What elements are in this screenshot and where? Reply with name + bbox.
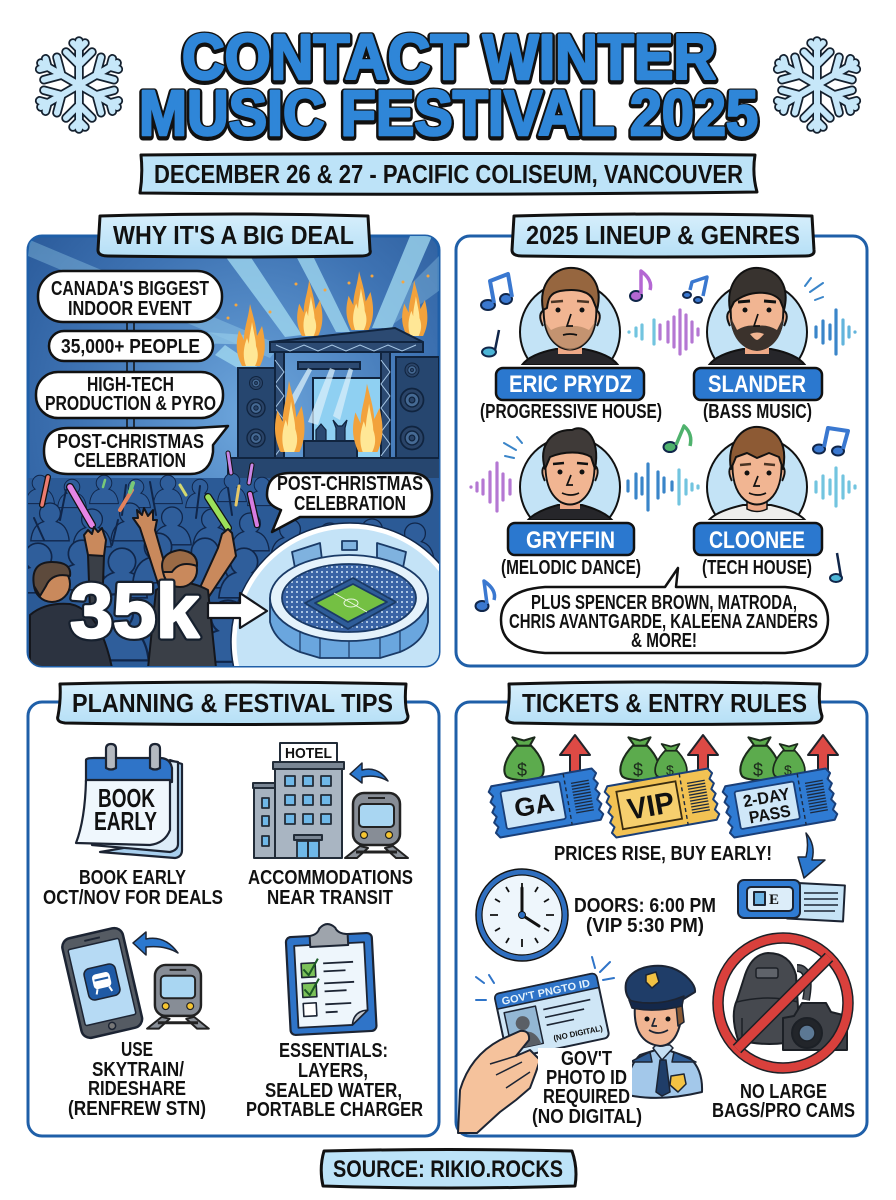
heading: tickets bbox=[507, 682, 822, 724]
icon: phone with transit app bbox=[61, 926, 144, 1040]
heading: why it's a big deal bbox=[98, 214, 370, 257]
bubble: high-tech production and pyro: HIGH-TECH bbox=[87, 374, 174, 396]
sound waves bbox=[471, 310, 855, 511]
caption: essentials: ESSENTIALS: bbox=[279, 1040, 388, 1062]
caption: essentials: PORTABLE CHARGER bbox=[246, 1099, 423, 1121]
arrow to phone bbox=[133, 932, 178, 955]
text: doors: DOORS: 6:00 PM bbox=[574, 895, 716, 917]
icon: right snowflake bbox=[772, 41, 862, 129]
callout: more artists bbox=[501, 568, 828, 653]
caption: essentials bbox=[246, 1040, 423, 1121]
crowd bbox=[13, 473, 440, 668]
genre: (TECH HOUSE) bbox=[702, 557, 812, 579]
icon: security officer bbox=[626, 966, 702, 1098]
stage with truss, screen and DJ bbox=[228, 328, 440, 482]
panel: why it's a big deal bbox=[26, 212, 440, 668]
heading: why it's a big deal: WHY IT'S A BIG DEAL bbox=[113, 220, 354, 250]
bubble: post-Christmas celebration over crowd: CELEBRATION bbox=[294, 493, 406, 515]
icon: left snowflake bbox=[34, 41, 124, 129]
caption: photo ID: PHOTO ID bbox=[546, 1067, 627, 1089]
genre: (MELODIC DANCE) bbox=[501, 557, 641, 579]
stadium inset circle bbox=[230, 522, 439, 666]
genre: (PROGRESSIVE HOUSE) bbox=[480, 401, 662, 423]
name badge bbox=[508, 523, 634, 555]
caption: book early bbox=[43, 867, 223, 909]
caption: essentials: SEALED WATER, bbox=[265, 1080, 402, 1102]
icon: checklist clipboard bbox=[285, 922, 377, 1035]
caption: photo ID: REQUIRED bbox=[543, 1086, 630, 1108]
bubble: high-tech production and pyro bbox=[36, 372, 223, 418]
ticket: 2-day pass with price rise: 2-DAY bbox=[742, 784, 792, 811]
arrow to stadium bbox=[208, 593, 267, 628]
heading: planning: PLANNING & FESTIVAL TIPS bbox=[72, 688, 393, 718]
pyro flames bbox=[226, 271, 430, 366]
icon: hotel near transit bbox=[253, 743, 344, 858]
ticket: VIP with price rise: $ bbox=[666, 762, 674, 778]
callout: more artists: & MORE! bbox=[631, 630, 697, 652]
artist: Cloonee bbox=[694, 427, 822, 579]
caption: skytrain: RIDESHARE bbox=[88, 1078, 186, 1100]
caption: no large bags: NO LARGE bbox=[740, 1081, 827, 1103]
ticket: GA with price rise: GA bbox=[512, 787, 557, 823]
ticket: VIP with price rise: VIP bbox=[625, 786, 677, 827]
icon: clock bbox=[476, 869, 568, 961]
name badge: SLANDER bbox=[708, 371, 806, 398]
caption: skytrain: USE bbox=[121, 1039, 153, 1061]
ticket: 2-day pass with price rise: PASS bbox=[748, 801, 792, 827]
caption: book early: BOOK EARLY bbox=[79, 867, 187, 889]
icon: hotel near transit: HOTEL bbox=[285, 745, 332, 762]
heading: lineup: 2025 LINEUP & GENRES bbox=[526, 220, 800, 250]
stage speakers bbox=[247, 363, 424, 450]
caption: essentials: LAYERS, bbox=[298, 1060, 368, 1082]
ticket: VIP with price rise bbox=[604, 735, 720, 838]
stage light beams bbox=[28, 236, 440, 378]
source banner: SOURCE: RIKIO.ROCKS bbox=[333, 1156, 563, 1183]
ticket: 2-day pass with price rise: $ bbox=[753, 760, 763, 780]
caption: photo ID bbox=[532, 1048, 642, 1128]
bubble: post-Christmas celebration bbox=[44, 426, 228, 474]
bubble: post-Christmas celebration: CELEBRATION bbox=[74, 450, 186, 472]
caption: accommodations: NEAR TRANSIT bbox=[267, 887, 393, 909]
arrow to mobile ticket bbox=[798, 833, 825, 878]
icon: hand holding photo ID: (NO DIGITAL) bbox=[553, 1024, 604, 1043]
icon: train at hotel bbox=[345, 793, 408, 858]
ticket: VIP with price rise: $ bbox=[633, 760, 643, 780]
ticket: GA with price rise: $ bbox=[517, 760, 527, 780]
icon: hand holding photo ID: GOV'T PNGTO ID bbox=[501, 977, 592, 1008]
title bbox=[139, 21, 758, 150]
panel: lineup and genres bbox=[456, 214, 867, 666]
artist: Slander bbox=[694, 268, 822, 423]
caption: no large bags: BAGS/PRO CAMS bbox=[712, 1100, 855, 1122]
icon: train by phone bbox=[147, 965, 209, 1029]
caption background bbox=[538, 1048, 632, 1128]
heading: lineup bbox=[512, 214, 814, 257]
caption: photo ID: (NO DIGITAL) bbox=[532, 1106, 642, 1128]
artist: Gryffin bbox=[501, 428, 641, 579]
title: CONTACT WINTER bbox=[182, 22, 716, 94]
bubble: Canada's biggest indoor event: INDOOR EVENT bbox=[68, 298, 192, 320]
sparkle ticks bbox=[504, 278, 823, 458]
text: prices rise: PRICES RISE, BUY EARLY! bbox=[554, 843, 772, 865]
big 35k number: 35k bbox=[70, 569, 200, 654]
bubble: 35,000+ people: 35,000+ PEOPLE bbox=[61, 336, 200, 358]
text: doors: (VIP 5:30 PM) bbox=[586, 915, 704, 937]
bubble: 35,000+ people bbox=[49, 331, 213, 361]
panel: tickets and entry rules bbox=[456, 682, 867, 1136]
heading: tickets: TICKETS & ENTRY RULES bbox=[522, 688, 807, 718]
name badge: GRYFFIN bbox=[526, 527, 615, 554]
sparkle ticks around ID bbox=[476, 957, 614, 1000]
ticket: 2-day pass with price rise: $ bbox=[784, 762, 792, 778]
caption: photo ID: GOV'T bbox=[561, 1048, 612, 1070]
icon: ticket stub bbox=[738, 880, 845, 921]
bubble: post-Christmas celebration over crowd bbox=[267, 473, 432, 532]
glow sticks bbox=[42, 453, 257, 528]
icon: book early calendar: EARLY bbox=[94, 806, 157, 836]
big 35k number: 35k bbox=[70, 569, 200, 654]
connector bars between bubbles bbox=[127, 321, 134, 428]
music notes bbox=[476, 271, 848, 611]
bubble: high-tech production and pyro: PRODUCTION & PYRO bbox=[45, 393, 216, 415]
icon: book early calendar: BOOK bbox=[98, 783, 155, 813]
caption: no large bags bbox=[712, 1081, 855, 1122]
icon: hand holding photo ID bbox=[458, 973, 610, 1133]
bubble: Canada's biggest indoor event: CANADA'S BIGGEST bbox=[51, 278, 209, 300]
bubble: post-Christmas celebration over crowd: POST-CHRISTMAS bbox=[277, 473, 423, 495]
caption: skytrain: (RENFREW STN) bbox=[68, 1098, 206, 1120]
bubble: post-Christmas celebration: POST-CHRISTMAS bbox=[57, 431, 204, 453]
text: doors bbox=[574, 895, 716, 937]
date and venue banner: DECEMBER 26 & 27 - PACIFIC COLISEUM, VANCOUVER bbox=[154, 159, 743, 189]
heading: planning bbox=[58, 682, 408, 724]
icon: no bags or cameras bbox=[713, 933, 853, 1073]
caption: accommodations bbox=[248, 867, 413, 909]
genre: (BASS MUSIC) bbox=[703, 401, 812, 423]
date and venue banner bbox=[140, 154, 757, 194]
title: MUSIC FESTIVAL 2025 bbox=[139, 78, 758, 150]
icon: ticket stub: E bbox=[769, 892, 779, 908]
title: CONTACT WINTER bbox=[182, 21, 716, 93]
foreground fans bbox=[30, 508, 236, 668]
caption: accommodations: ACCOMMODATIONS bbox=[248, 867, 413, 889]
stadium bbox=[270, 541, 428, 658]
arrow to hotel bbox=[350, 763, 388, 783]
stage flames bbox=[275, 381, 382, 452]
icon: book early calendar bbox=[76, 744, 182, 858]
name badge: ERIC PRYDZ bbox=[509, 371, 632, 398]
panel: planning and festival tips bbox=[28, 682, 439, 1136]
ticket: GA with price rise bbox=[488, 735, 604, 838]
source banner bbox=[321, 1150, 576, 1188]
callout: more artists: PLUS SPENCER BROWN, MATRODA, bbox=[531, 592, 797, 614]
artist: Eric Prydz bbox=[480, 268, 662, 423]
caption: skytrain bbox=[68, 1039, 206, 1120]
ticket: 2-day pass with price rise bbox=[722, 735, 838, 838]
name badge: CLOONEE bbox=[709, 527, 805, 554]
title: MUSIC FESTIVAL 2025 bbox=[139, 77, 758, 149]
bubble: Canada's biggest indoor event bbox=[38, 271, 222, 322]
caption: book early: OCT/NOV FOR DEALS bbox=[43, 887, 223, 909]
caption: skytrain: SKYTRAIN/ bbox=[92, 1059, 184, 1081]
